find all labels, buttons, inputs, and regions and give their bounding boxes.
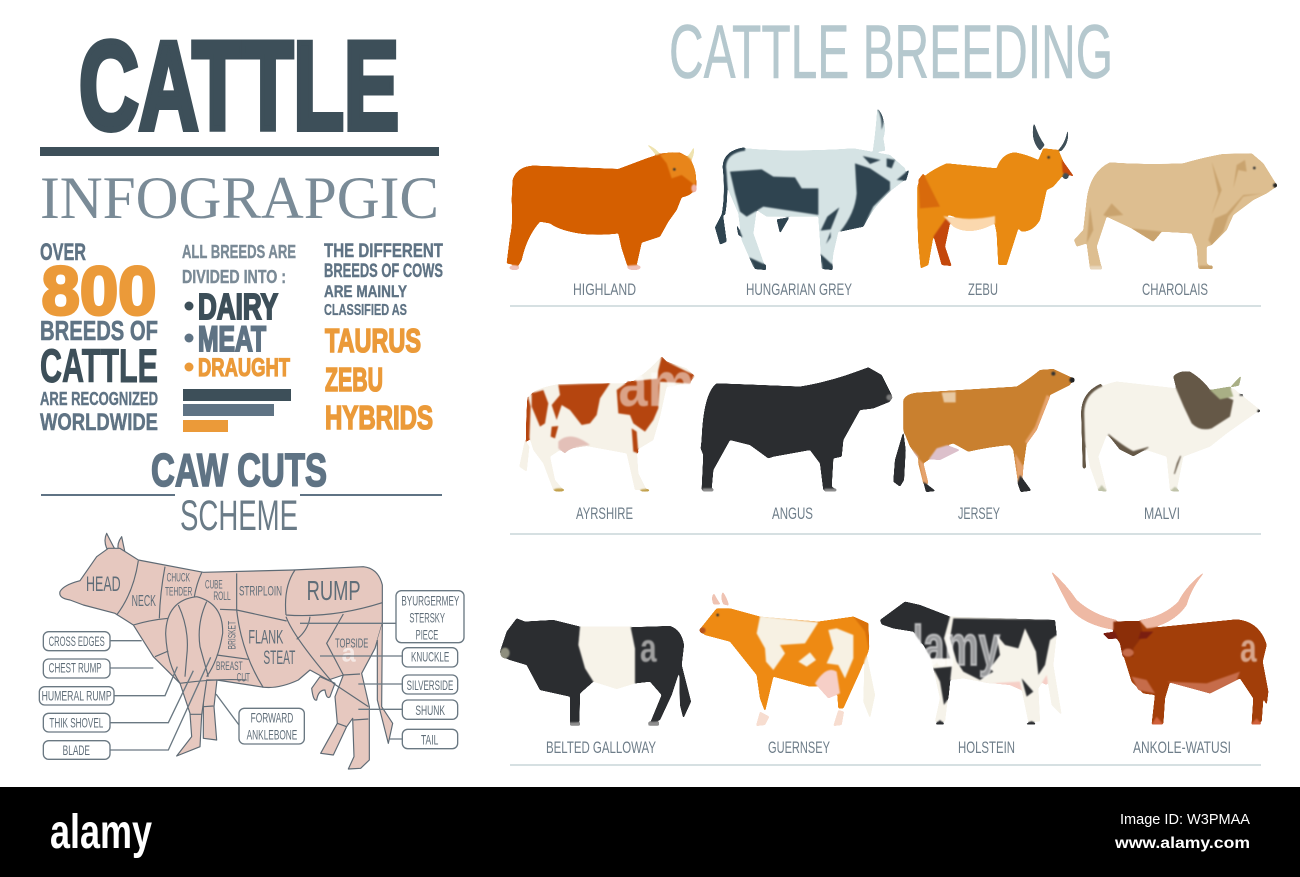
footer bar: alamy: [50, 806, 152, 859]
cut labels: [86, 571, 368, 685]
text block: over 800 breeds: [40, 239, 158, 436]
label: Charolais: CHAROLAIS: [1142, 280, 1208, 299]
bar chart: breed types: [183, 389, 291, 432]
cut labels: NECK: [132, 593, 156, 610]
footer bar: www.alamy.com: [1114, 835, 1250, 852]
text block: breed divisions: ALL BREEDS ARE: [182, 242, 296, 262]
text block: over 800 breeds: CATTLE: [40, 339, 158, 392]
cow: Charolais: [1074, 153, 1277, 269]
callout: byurgermey stersky piece: STERSKY: [409, 610, 445, 626]
main title: CATTLE: CATTLE: [79, 17, 399, 156]
callout: humeral rump: HUMERAL RUMP: [42, 687, 112, 703]
label: Zebu: ZEBU: [968, 280, 998, 299]
row divider: [510, 764, 1261, 766]
cut labels: BRISKET: [226, 621, 238, 649]
text block: breed divisions: MEAT: [198, 320, 266, 359]
text block: classification: ARE MAINLY: [324, 282, 408, 301]
cut labels: ROLL: [213, 589, 231, 603]
text block: over 800 breeds: WORLDWIDE: [40, 409, 158, 436]
text block: breed divisions: [182, 242, 296, 382]
text block: breed divisions: DRAUGHT: [198, 354, 290, 382]
heading: CAW CUTS: CAW CUTS: [151, 444, 327, 496]
label: Highland: HIGHLAND: [573, 280, 636, 299]
cut labels: STEAT: [263, 648, 295, 669]
cow cuts diagram: [39, 533, 464, 769]
row divider: [510, 533, 1261, 535]
cow: Zebu: [917, 123, 1074, 268]
cow: Holstein: [880, 602, 1062, 724]
callout: byurgermey stersky piece: BYURGERMEY: [401, 593, 460, 609]
text block: classification: THE DIFFERENT: [324, 240, 443, 262]
callout: tail: TAIL: [421, 731, 438, 747]
cow: Malvi: [1083, 371, 1260, 492]
callout connector lines: [110, 623, 402, 750]
text block: over 800 breeds: ARE RECOGNIZED: [40, 389, 158, 409]
label: Angus: ANGUS: [772, 504, 813, 523]
cow: Hungarian Grey: [715, 108, 909, 270]
cow cuts silhouette: [60, 533, 393, 769]
cow: Holstein: lamy: [913, 615, 1000, 678]
cow: Guernsey: [699, 592, 875, 726]
subtitle: INFOGRAPGIC: INFOGRAPGIC: [40, 165, 439, 231]
callout: silverside: SILVERSIDE: [407, 677, 453, 693]
text block: breed divisions: DIVIDED INTO :: [182, 267, 286, 287]
text block: classification: BREEDS OF COWS: [324, 260, 443, 282]
cut labels: CUT: [237, 671, 250, 685]
cow: Ayrshire: [519, 350, 695, 492]
callout: blade: BLADE: [63, 742, 90, 758]
callout: blade: [43, 741, 110, 759]
cow: Ankole-Watusi: [1051, 571, 1268, 724]
cow: Ankole-Watusi: a: [1240, 627, 1257, 671]
text block: classification: TAURUS: [325, 322, 421, 359]
callout: forward anklebone: FORWARD: [251, 709, 293, 725]
callout: forward anklebone: [239, 708, 304, 744]
text block: classification: ZEBU: [325, 361, 383, 398]
cut labels: RUMP: [307, 575, 361, 606]
label: Holstein: HOLSTEIN: [958, 738, 1015, 757]
callout: forward anklebone: ANKLEBONE: [247, 726, 297, 742]
callout: thik shovel: THIK SHOVEL: [49, 714, 103, 730]
cow: Belted Galloway: [500, 618, 691, 726]
callout: byurgermey stersky piece: [396, 591, 464, 643]
cow: Ayrshire: am: [618, 350, 694, 420]
heading: SCHEME with side rules: SCHEME: [180, 492, 298, 540]
callout: cross edges: [43, 632, 110, 651]
text block: classification: [324, 240, 443, 436]
row divider: [510, 305, 1261, 307]
label: Ankole-Watusi: ANKOLE-WATUSI: [1133, 738, 1231, 757]
text block: over 800 breeds: BREEDS OF: [40, 315, 158, 346]
callout: silverside: [402, 675, 458, 694]
label: Jersey: JERSEY: [958, 504, 1000, 523]
callout: knuckle: [402, 648, 458, 667]
footer bar: [0, 787, 1300, 877]
cow: Jersey: [893, 369, 1075, 492]
label: Belted Galloway: BELTED GALLOWAY: [546, 738, 656, 757]
label: Hungarian Grey: HUNGARIAN GREY: [746, 280, 852, 299]
cut labels: TOPSIDE: [335, 636, 368, 650]
cut labels: TEHDER: [165, 584, 193, 598]
cow: Angus: [701, 367, 892, 491]
cut labels: FLANK: [248, 627, 283, 648]
callout: chest rump: CHEST RUMP: [49, 660, 102, 676]
cut labels: a: [342, 638, 356, 668]
cow: Highland: [507, 144, 697, 270]
label: Ayrshire: AYRSHIRE: [576, 504, 633, 523]
callout: shunk: [402, 700, 458, 719]
callout: byurgermey stersky piece: PIECE: [416, 626, 438, 642]
cut labels: CUBE: [205, 577, 223, 591]
callout: thik shovel: [43, 713, 110, 732]
cut labels: BREAST: [216, 659, 243, 673]
callout: chest rump: [43, 659, 110, 678]
title underline bar: [40, 147, 439, 156]
cut labels: STRIPLOIN: [239, 583, 282, 599]
callout: humeral rump: [39, 687, 114, 705]
footer bar: Image ID: W3PMAA: [1120, 811, 1250, 828]
cut labels: CHUCK: [167, 571, 190, 585]
callout: knuckle: KNUCKLE: [411, 648, 449, 664]
cut labels: HEAD: [86, 573, 121, 596]
cow: Belted Galloway: a: [640, 627, 657, 671]
label: Malvi: MALVI: [1144, 504, 1180, 523]
callout: shunk: SHUNK: [415, 702, 445, 718]
callout: tail: [402, 729, 458, 749]
text block: classification: HYBRIDS: [325, 399, 433, 436]
text block: classification: CLASSIFIED AS: [324, 302, 407, 319]
text block: breed divisions: DAIRY: [198, 286, 278, 327]
label: Guernsey: GUERNSEY: [768, 738, 830, 757]
callout: cross edges: CROSS EDGES: [49, 633, 105, 649]
text block: over 800 breeds: OVER: [40, 239, 86, 266]
text block: over 800 breeds: 800: [42, 252, 156, 330]
